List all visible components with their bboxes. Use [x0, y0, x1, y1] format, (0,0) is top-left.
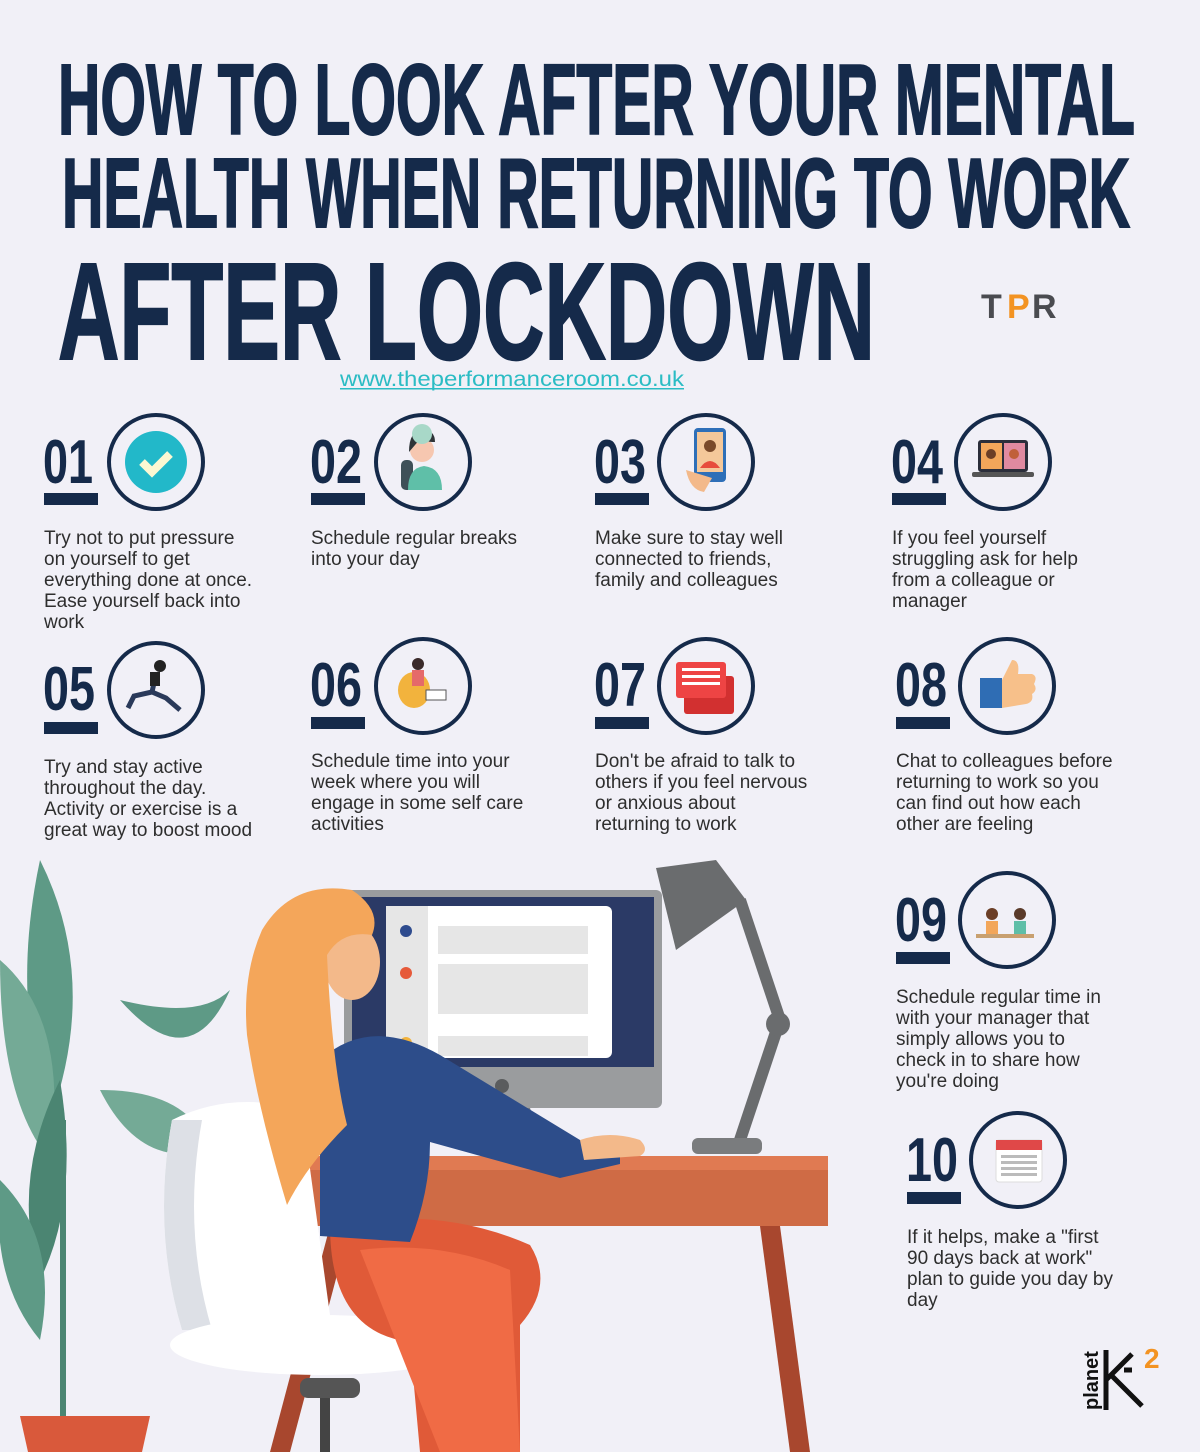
tip 04: from a colleague or: [892, 570, 1055, 591]
tip 09: you're doing: [896, 1071, 999, 1092]
icon: person: [401, 424, 442, 490]
chair: [164, 1102, 332, 1330]
tip 09: simply allows you to: [896, 1029, 1065, 1050]
tip 05: Try and stay active: [44, 757, 203, 778]
tip 05: throughout the day.: [44, 778, 206, 799]
tip 10: [906, 1113, 1113, 1311]
logo: TPR: T: [981, 288, 1002, 326]
logo: TPR: P: [1007, 288, 1030, 326]
tip 06: [310, 639, 523, 835]
tip 10: 90 days back at work": [907, 1248, 1092, 1269]
tip 07: returning to work: [595, 814, 737, 835]
lamp: [740, 900, 780, 1140]
icon: laptop video call: [972, 440, 1034, 477]
tip 08: [895, 639, 1113, 835]
desk: [290, 1156, 828, 1226]
tip 10: If it helps, make a "first: [907, 1227, 1099, 1248]
tip 02: Schedule regular breaks: [311, 528, 517, 549]
tip 05: [43, 643, 252, 841]
tip 06: 06: [310, 651, 362, 720]
tip 08: 08: [895, 651, 947, 720]
tip 01: on yourself to get: [44, 549, 190, 570]
tip 09: with your manager that: [895, 1008, 1090, 1029]
tip 03: 03: [594, 428, 646, 497]
logo: planet k2: 2: [1144, 1343, 1160, 1374]
icon: self care chair: [398, 658, 446, 708]
tip 06: activities: [311, 814, 384, 835]
tip 07: others if you feel nervous: [595, 772, 807, 793]
icon: exercising person: [128, 660, 180, 710]
plant: [0, 860, 230, 1420]
icon: calendar: [996, 1140, 1042, 1182]
tip 03: connected to friends,: [595, 549, 771, 570]
tip 01: work: [43, 612, 85, 633]
tip 01: Try not to put pressure: [44, 528, 234, 549]
tip 10: 10: [906, 1126, 958, 1195]
tip 06: engage in some self care: [311, 793, 523, 814]
tip 10: plan to guide you day by: [907, 1269, 1113, 1290]
tip 09: 09: [895, 886, 947, 955]
tip 04: If you feel yourself: [892, 528, 1047, 549]
tip 05: 05: [43, 655, 95, 724]
tip 01: [43, 415, 252, 633]
icon: check: [125, 431, 187, 493]
icon: phone: [686, 428, 726, 492]
logo: TPR: [981, 288, 1057, 326]
tip 01: everything done at once.: [44, 570, 252, 591]
woman: [330, 1218, 540, 1452]
logo: planet k2: [1081, 1343, 1160, 1410]
tip 02: 02: [310, 428, 362, 497]
illustration: woman at desk: [0, 860, 828, 1452]
title: [58, 44, 1135, 389]
tip 07: [594, 639, 807, 835]
tip 07: 07: [594, 651, 646, 720]
tip 08: Chat to colleagues before: [896, 751, 1113, 772]
tip 06: week where you will: [310, 772, 480, 793]
tip 07: Don't be afraid to talk to: [595, 751, 795, 772]
tip 04: [891, 415, 1078, 612]
icon: thumbs up: [980, 660, 1036, 708]
tip 04: struggling ask for help: [892, 549, 1078, 570]
tip 07: or anxious about: [595, 793, 736, 814]
tip 09: check in to share how: [896, 1050, 1080, 1071]
tip 02: [310, 415, 517, 570]
tip 08: can find out how each: [896, 793, 1081, 814]
tip 05: Activity or exercise is a: [44, 799, 238, 820]
icon: chat bubbles: [676, 662, 734, 714]
monitor: [344, 890, 662, 1108]
tip 05: great way to boost mood: [44, 820, 252, 841]
tip 03: family and colleagues: [595, 570, 778, 591]
tip 02: into your day: [311, 549, 420, 570]
website link: www.theperformanceroom.co.uk: [339, 368, 685, 391]
tip 04: manager: [892, 591, 968, 612]
tip 04: 04: [891, 428, 943, 497]
tip 01: 01: [43, 428, 93, 497]
tip 09: [895, 873, 1101, 1092]
logo: planet k2: planet: [1081, 1351, 1103, 1410]
tip 10: day: [907, 1290, 938, 1311]
tip 08: returning to work so you: [896, 772, 1099, 793]
tip 08: other are feeling: [896, 814, 1033, 835]
tip 09: Schedule regular time in: [896, 987, 1101, 1008]
logo: TPR: R: [1032, 288, 1057, 326]
tip 03: Make sure to stay well: [595, 528, 783, 549]
tip 03: [594, 415, 783, 591]
tip 06: Schedule time into your: [311, 751, 510, 772]
icon: meeting: [976, 908, 1034, 938]
tip 01: Ease yourself back into: [44, 591, 240, 612]
